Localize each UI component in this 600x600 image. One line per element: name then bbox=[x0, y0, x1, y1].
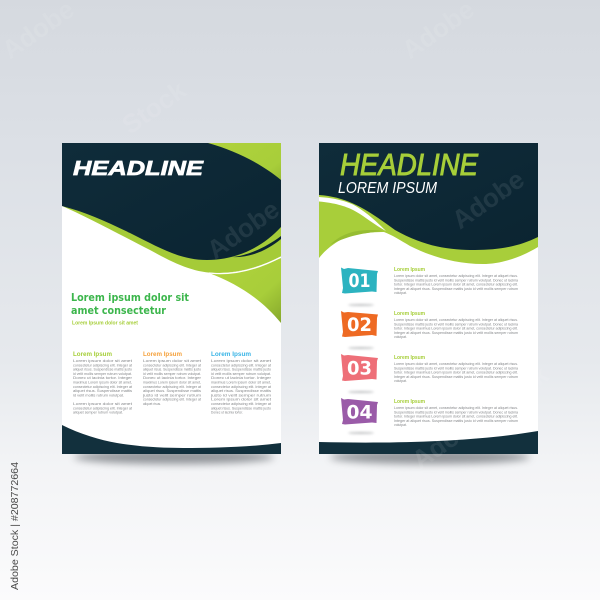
column 1 body text: aliquet risus. Suspendisse mattis bbox=[73, 389, 132, 393]
badge 01: 01 bbox=[348, 270, 370, 292]
right flyer sub-headline: LOREM IPSUM bbox=[338, 180, 437, 197]
stock watermarks: Stock bbox=[116, 74, 192, 140]
step 01 text: Integer at aliquet risus. Suspendisse mattis justo id velit mollis semper rutrum bbox=[394, 287, 518, 291]
left flyer page bbox=[62, 143, 281, 454]
left flyer tagline: Lorem Ipsum dolor sit amet bbox=[72, 320, 138, 326]
step 04 text bbox=[394, 406, 518, 427]
step 04 text: Suspendisse mattis justo id velit mollis semper rutrum volutpat. Donec ut lacinia bbox=[394, 410, 518, 414]
right flyer dark header bbox=[319, 143, 538, 250]
step 03 text: tortor. Integer maximus Lorem ipsum dolor sit amet, consectetur adipiscing elit. bbox=[394, 371, 518, 375]
column 2 body text: justo id velit semper rutrum bbox=[142, 393, 201, 397]
column 3 body text: consectetur adipiscing elit. Integer at bbox=[211, 363, 271, 367]
stock watermarks: Stock bbox=[496, 529, 572, 595]
column 1 bbox=[73, 351, 133, 415]
panel: right flyer bbox=[319, 143, 538, 454]
column 1 body text: Lorem ipsum dolor sit amet bbox=[73, 402, 132, 406]
column 3 body text: aliquet risus. Suspendisse mattis justo bbox=[211, 368, 271, 372]
step 04 heading: Lorem Ipsum bbox=[394, 399, 425, 405]
stock watermarks: Stock bbox=[266, 529, 342, 595]
column 3 body text: Donec ut lacinia tortor. Integer bbox=[211, 376, 272, 380]
step 01 bbox=[341, 267, 518, 306]
step 01 text: Lorem ipsum dolor sit amet, consectetur adipiscing elit. Integer at aliquet risus. bbox=[394, 274, 518, 278]
left flyer green wave bbox=[62, 206, 281, 273]
column 3 body text bbox=[210, 359, 272, 415]
column 2 body text bbox=[142, 359, 202, 406]
step 04 shadow bbox=[348, 432, 374, 434]
step 04 text: tortor. Integer maximus Lorem ipsum dolor sit amet, consectetur adipiscing elit. bbox=[394, 415, 518, 419]
badge 04 bbox=[341, 398, 378, 424]
column 2 body text: aliquet risus. Suspendisse mattis bbox=[143, 389, 201, 393]
column 1 body text: id velit mollis rutrum volutpat. bbox=[73, 393, 124, 397]
step 03 text: Lorem ipsum dolor sit amet, consectetur adipiscing elit. Integer at aliquet risus. bbox=[394, 362, 518, 366]
column 3 heading: Lorem Ipsum bbox=[211, 351, 251, 358]
step 03 shadow bbox=[348, 391, 374, 393]
column 3 body text: consectetur adipiscing elit. Integer at bbox=[211, 385, 271, 389]
left flyer lower green swoosh bbox=[209, 258, 281, 323]
column 1 body text: consectetur adipiscing elit. Integer at bbox=[73, 363, 132, 367]
panel: left flyer bbox=[62, 143, 281, 454]
right flyer darker green fold bbox=[330, 230, 385, 245]
right flyer shadow bbox=[330, 450, 530, 464]
step 03 heading: Lorem Ipsum bbox=[394, 355, 425, 361]
step 01 shadow bbox=[348, 304, 374, 306]
step 04 text: Integer at aliquet risus. Suspendisse mattis justo id velit mollis semper rutrum bbox=[394, 419, 518, 423]
right flyer headline: HEADLINE bbox=[340, 148, 479, 182]
right flyer bottom dark band bbox=[319, 431, 538, 454]
step 02 bbox=[341, 311, 518, 349]
column 3 body text: Donec ut lacinia tortor. bbox=[211, 411, 243, 415]
step 01 text bbox=[394, 274, 518, 295]
column 1 body text: Donec ut lacinia tortor. Integer bbox=[73, 376, 133, 380]
left flyer headline: HEADLINE bbox=[73, 158, 204, 180]
step 02 text bbox=[394, 318, 518, 339]
step 02 text: Suspendisse mattis justo id velit mollis semper rutrum volutpat. Donec ut lacinia bbox=[394, 322, 518, 326]
column 3 body text: consectetur adipiscing elit. Integer at bbox=[211, 402, 271, 406]
step 03 text: Suspendisse mattis justo id velit mollis semper rutrum volutpat. Donec ut lacinia bbox=[394, 366, 518, 370]
step 03 text bbox=[394, 362, 518, 383]
badge 01 bbox=[341, 268, 378, 294]
step 01 text: Suspendisse mattis justo id velit mollis semper rutrum volutpat. Donec ut lacinia bbox=[394, 278, 518, 282]
column 2 body text: consectetur adipiscing elit. Integer at bbox=[143, 398, 201, 402]
column 2 heading: Lorem Ipsum bbox=[143, 351, 182, 358]
left flyer white stripe bbox=[209, 257, 281, 274]
step 02 text: tortor. Integer maximus Lorem ipsum dolor sit amet, consectetur adipiscing elit. bbox=[394, 327, 518, 331]
column 3 body text: aliquet risus. Suspendisse mattis bbox=[211, 389, 271, 393]
step 04 bbox=[341, 398, 518, 434]
left flyer dark accent line bbox=[233, 236, 281, 257]
badge 03: 03 bbox=[347, 358, 372, 380]
stock watermarks: Adobe bbox=[201, 194, 285, 265]
step 03 text: Integer at aliquet risus. Suspendisse mattis justo id velit mollis semper rutrum bbox=[394, 375, 518, 379]
step 04 text: volutpat. bbox=[394, 423, 407, 427]
column 3 body text: maximus Lorem ipsum dolor sit amet, bbox=[211, 380, 271, 384]
column 1 body text: consectetur adipiscing elit. Integer at bbox=[73, 406, 132, 410]
step 04 text: Lorem ipsum dolor sit amet, consectetur adipiscing elit. Integer at aliquet risus. bbox=[394, 406, 518, 410]
step 02 shadow bbox=[348, 347, 374, 349]
right flyer white stripe bbox=[319, 197, 386, 231]
image id side label: Adobe Stock | #208772664 bbox=[9, 462, 21, 590]
badge 03 bbox=[341, 354, 378, 381]
column 2 body text: Lorem ipsum dolor sit amet bbox=[143, 359, 201, 363]
column 1 body text: id velit mollis semper rutrum volutpat. bbox=[73, 372, 132, 376]
column 1 body text: consectetur adipiscing elit. Integer at bbox=[73, 385, 132, 389]
column 3 body text: justo id velit semper rutrum bbox=[210, 393, 271, 397]
column 2 body text: aliquet risus. bbox=[143, 402, 161, 406]
column 1 heading: Lorem Ipsum bbox=[73, 351, 112, 358]
column 3 body text: id velit mollis semper rutrum volutpat. bbox=[211, 372, 271, 376]
column 2 body text: id velit mollis semper rutrum volutpat. bbox=[143, 372, 201, 376]
column 2 bbox=[142, 351, 202, 406]
left flyer bottom dark band bbox=[62, 425, 281, 454]
left flyer dark header bbox=[62, 143, 281, 260]
step 01 text: tortor. Integer maximus Lorem ipsum dolor sit amet, consectetur adipiscing elit. bbox=[394, 283, 518, 287]
badge 04: 04 bbox=[346, 402, 372, 424]
badge 02 bbox=[341, 311, 378, 337]
step 03 bbox=[341, 354, 518, 393]
step 01 text: volutpat. bbox=[394, 291, 407, 295]
column 2 body text: consectetur adipiscing elit. Integer at bbox=[143, 385, 201, 389]
column 3 bbox=[210, 351, 272, 415]
column 1 body text: aliquet risus. Suspendisse mattis justo bbox=[73, 368, 132, 372]
stock watermarks: Adobe Stock bbox=[56, 479, 204, 595]
stock watermarks: Adobe Stock bbox=[406, 359, 554, 475]
column 3 body text: Lorem ipsum dolor sit amet bbox=[211, 359, 271, 363]
left flyer top right green corner bbox=[205, 143, 281, 200]
badge 02: 02 bbox=[347, 314, 372, 336]
column 1 body text: maximus Lorem ipsum dolor sit amet, bbox=[73, 380, 132, 384]
step 02 text: Lorem ipsum dolor sit amet, consectetur adipiscing elit. Integer at aliquet risus. bbox=[394, 318, 518, 322]
left flyer subheading bbox=[71, 291, 189, 317]
column 2 body text: aliquet risus. Suspendisse mattis justo bbox=[143, 368, 201, 372]
step 02 text: Integer at aliquet risus. Suspendisse mattis justo id velit mollis semper rutrum bbox=[394, 331, 518, 335]
column 1 body text bbox=[73, 359, 133, 415]
left flyer shadow bbox=[74, 450, 274, 464]
column 2 body text: maximus Lorem ipsum dolor sit amet, bbox=[143, 380, 201, 384]
step 03 text: volutpat. bbox=[394, 379, 407, 383]
column 1 body text: Lorem ipsum dolor sit amet bbox=[73, 359, 132, 363]
left flyer subheading: amet consectetur bbox=[71, 304, 166, 317]
step 01 heading: Lorem Ipsum bbox=[394, 267, 425, 273]
column 3 body text: Lorem ipsum dolor sit amet bbox=[211, 398, 271, 402]
left flyer subheading: Lorem ipsum dolor sit bbox=[71, 291, 189, 304]
right flyer green wave and left swoosh bbox=[319, 195, 538, 264]
column 1 body text: aliquet semper rutrum volutpat. bbox=[73, 411, 123, 415]
step 02 heading: Lorem Ipsum bbox=[394, 311, 425, 317]
stock watermarks: Adobe bbox=[446, 164, 530, 235]
step 02 text: volutpat. bbox=[394, 335, 407, 339]
column 2 body text: consectetur adipiscing elit. Integer at bbox=[143, 363, 201, 367]
column 3 body text: aliquet risus. Suspendisse mattis justo bbox=[211, 406, 271, 410]
column 2 body text: Donec ut lacinia tortor. Integer bbox=[143, 376, 202, 380]
right flyer page bbox=[319, 143, 538, 454]
